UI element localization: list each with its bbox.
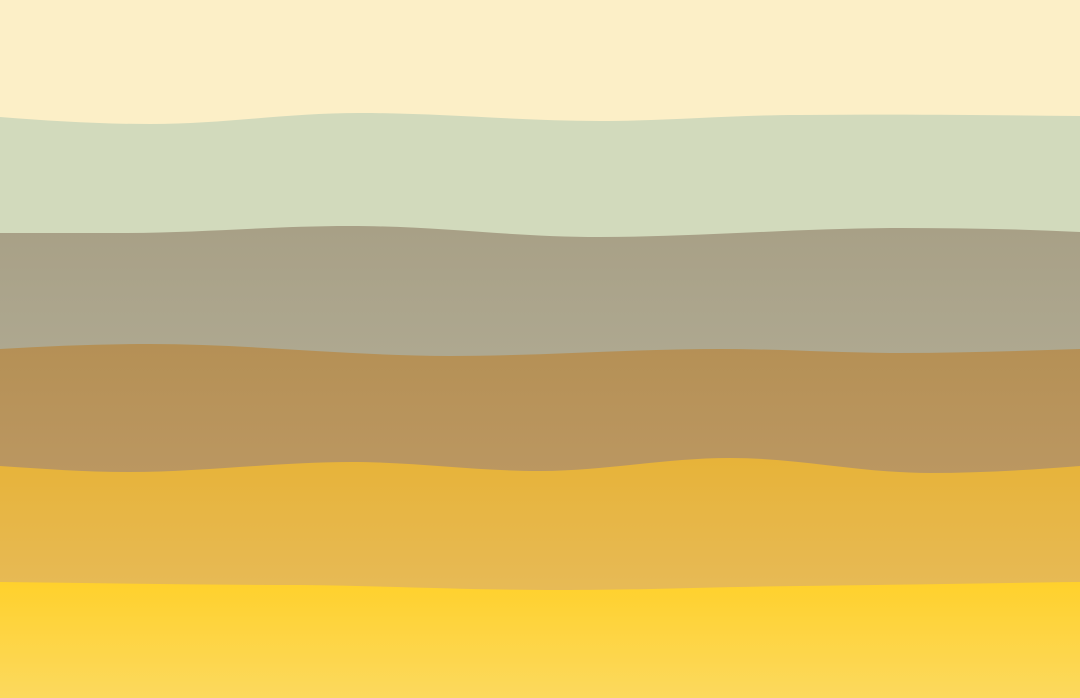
band: yellow [0, 582, 1080, 698]
band: amber [0, 458, 1080, 698]
band: brown [0, 344, 1080, 698]
band: grey taupe [0, 226, 1080, 698]
